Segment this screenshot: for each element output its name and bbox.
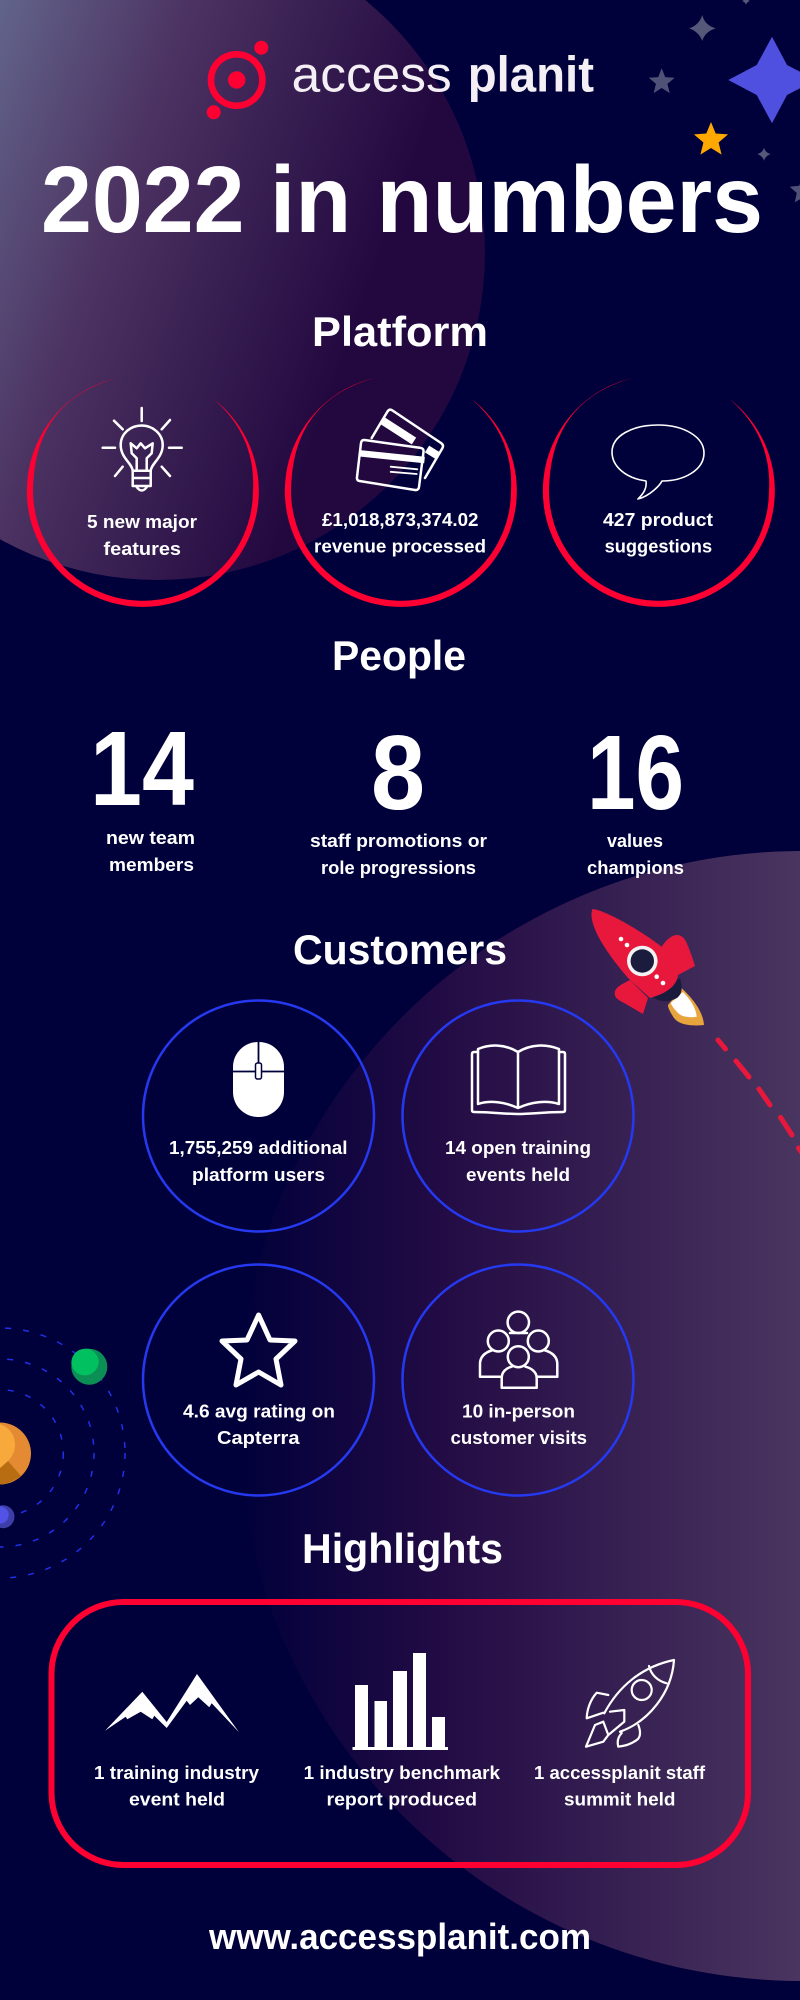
label (87, 512, 197, 559)
label (314, 510, 486, 556)
logo wordmark (292, 47, 594, 103)
red ring (285, 378, 517, 607)
label: 1 training industry (94, 1763, 259, 1783)
stat: new team members: 14 (90, 710, 194, 828)
blue ring (402, 1264, 634, 1496)
stat: values champions: values (607, 831, 663, 851)
stat: staff promotions: 8 (371, 714, 425, 832)
label: platform users (192, 1165, 325, 1185)
label: suggestions (605, 536, 712, 556)
panel: training events (402, 1000, 634, 1232)
icon: red rocket (591, 909, 704, 1025)
icon: mountains (105, 1674, 239, 1732)
decorative stars (649, 0, 800, 202)
panel: new features (27, 378, 259, 607)
stat: values champions: champions (587, 858, 684, 878)
panel: platform users (143, 1000, 374, 1232)
icon: credit cards (357, 410, 443, 490)
highlight: benchmark report (304, 1653, 501, 1810)
logo wordmark: access (292, 47, 452, 103)
stat: new team members: members (109, 855, 194, 875)
label: 1 industry benchmark (304, 1763, 501, 1783)
label: 4.6 avg rating on (183, 1402, 335, 1422)
arrow: dashed rocket trail (718, 1040, 800, 1153)
heading: Platform: Platform (312, 308, 488, 355)
stat: values champions (587, 714, 684, 878)
label (304, 1763, 501, 1810)
label: revenue processed (314, 536, 486, 556)
heading: Customers: Customers (293, 926, 507, 973)
label (169, 1138, 348, 1185)
icon: computer mouse (233, 1042, 284, 1117)
logo (207, 41, 594, 119)
icon: group of people (480, 1312, 557, 1388)
background planet: bottom right (237, 851, 800, 1981)
label: 1 accessplanit staff (534, 1763, 706, 1783)
label: 10 in-person (462, 1402, 575, 1422)
label: events held (466, 1165, 570, 1185)
label: 427 product (603, 510, 713, 530)
heading: People: People (332, 632, 466, 679)
red ring (27, 378, 259, 607)
red ring (543, 378, 775, 607)
label (603, 510, 713, 556)
panel: highlights (52, 1602, 748, 1865)
highlight: staff summit (534, 1660, 706, 1810)
icon: rocket outline (586, 1660, 674, 1747)
label: report produced (326, 1790, 477, 1810)
logo mark (207, 41, 268, 119)
icon: star (222, 1315, 295, 1385)
label (94, 1763, 259, 1810)
panel: Capterra rating (143, 1264, 374, 1496)
title: 2022 in numbers (41, 147, 763, 253)
stat: staff promotions: staff promotions or (310, 831, 487, 851)
red frame (52, 1602, 748, 1865)
blue ring (143, 1000, 374, 1232)
highlight: training event (94, 1674, 259, 1810)
label: event held (129, 1790, 225, 1810)
background planet: top left (0, 0, 485, 580)
label: Capterra (217, 1428, 301, 1448)
blue ring (402, 1000, 634, 1232)
label (445, 1138, 591, 1185)
label: £1,018,873,374.02 (322, 510, 478, 530)
panel: product suggestions (543, 378, 775, 607)
logo wordmark: planit (468, 47, 594, 103)
label: features (104, 539, 181, 559)
stat: new team members: new team (106, 828, 195, 848)
stat: staff promotions: role progressions (321, 858, 476, 878)
heading: Highlights: Highlights (302, 1525, 503, 1572)
icon: bar chart (352, 1653, 448, 1750)
icon: light bulb (103, 408, 182, 490)
website url: www.accessplanit.com (208, 1916, 591, 1957)
stat: staff promotions (310, 714, 487, 878)
label: 1,755,259 additional (169, 1138, 348, 1158)
label: 14 open training (445, 1138, 591, 1158)
label: customer visits (450, 1428, 587, 1448)
panel: customer visits (402, 1264, 634, 1496)
panel: revenue processed (285, 378, 517, 607)
stat: new team members (90, 710, 195, 875)
stat: values champions: 16 (587, 714, 684, 832)
solar system illustration (0, 1328, 125, 1578)
label (534, 1763, 706, 1810)
label (450, 1402, 587, 1448)
label: 5 new major (87, 512, 197, 532)
blue ring (143, 1264, 374, 1496)
label: summit held (564, 1790, 676, 1810)
icon: open book (472, 1046, 565, 1114)
label (183, 1402, 335, 1448)
icon: speech bubble (612, 425, 704, 499)
